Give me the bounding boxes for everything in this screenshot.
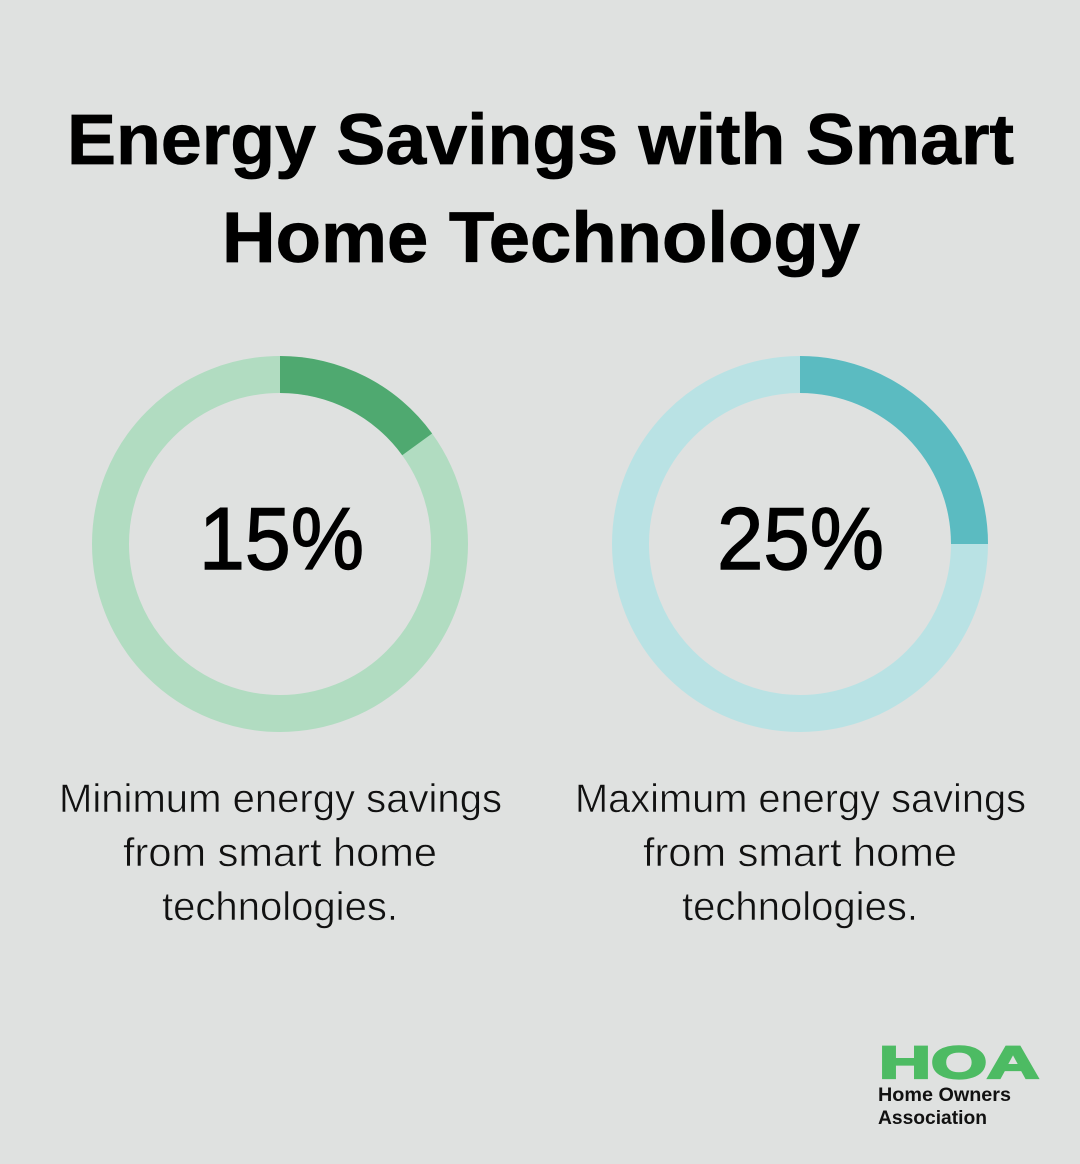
logo: Home Owners Association [878, 1037, 1039, 1129]
description: minimum: technologies. [162, 885, 398, 929]
logo: Home Owners Association: Home Owners [878, 1084, 1011, 1106]
donut chart: 15% [110, 356, 450, 714]
title: Home Technology [222, 199, 861, 278]
donut chart: 25% [630, 356, 988, 714]
description: maximum: Maximum energy savings [575, 777, 1026, 821]
value: 15%: 15% [199, 489, 364, 588]
title [67, 101, 1014, 278]
logo: Home Owners Association: Association [878, 1107, 987, 1129]
description: maximum [575, 777, 1026, 929]
description: minimum: from smart home [123, 831, 437, 875]
title: Energy Savings with Smart [67, 101, 1014, 180]
description: maximum: from smart home [643, 831, 957, 875]
panel: minimum savings [59, 356, 502, 929]
logo: Home Owners Association: HOA [879, 1037, 1039, 1088]
description: minimum: Minimum energy savings [59, 777, 502, 821]
description: minimum [59, 777, 502, 929]
value: 25%: 25% [717, 489, 884, 588]
panel: maximum savings [575, 356, 1026, 929]
description: maximum: technologies. [682, 885, 918, 929]
